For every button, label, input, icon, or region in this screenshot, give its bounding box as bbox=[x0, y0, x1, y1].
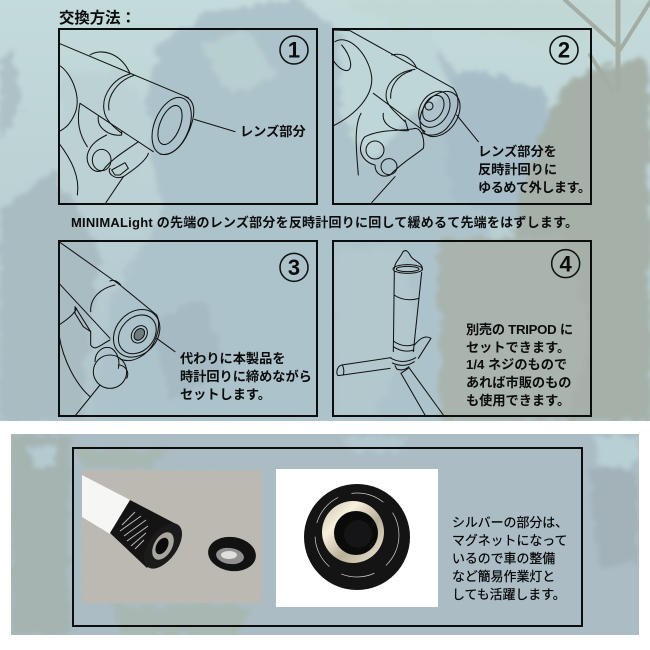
instruction text: ゆるめて外します。 bbox=[478, 179, 591, 195]
frame bbox=[73, 448, 582, 626]
description text: シルバーの部分は、 bbox=[452, 515, 568, 530]
instruction text: 反時計回りに bbox=[478, 161, 557, 177]
line art: light on tripod bbox=[337, 251, 443, 415]
photo: magnet disc on white bbox=[276, 469, 438, 607]
step number 4: 4 bbox=[560, 251, 573, 276]
panel 4: tripod bbox=[333, 241, 591, 416]
instruction text bbox=[180, 350, 312, 402]
instruction text: 1/4 ネジのもので bbox=[466, 357, 567, 372]
caption: MINIMALight の先端のレンズ部分を反時計回りに回して緩めるて先端をはずします。 bbox=[71, 215, 578, 230]
description text: など簡易作業灯と bbox=[452, 569, 555, 584]
description text: いるので車の整備 bbox=[452, 551, 555, 566]
step number 3: 3 bbox=[288, 255, 300, 280]
instruction text: セットできます。 bbox=[466, 340, 570, 355]
step number 3 bbox=[280, 253, 308, 281]
step number 4 bbox=[552, 250, 580, 278]
panel 2: turn lens counterclockwise bbox=[333, 29, 591, 204]
line art: light with product attached bbox=[59, 242, 175, 416]
step number 1: 1 bbox=[288, 38, 300, 63]
instruction text: も使用できます。 bbox=[466, 392, 570, 408]
frame bbox=[333, 29, 591, 204]
instruction text bbox=[466, 321, 573, 408]
frame bbox=[59, 241, 317, 416]
background: lower forest panel bbox=[11, 434, 639, 635]
line art: hand loosening lens bbox=[333, 30, 478, 203]
description text bbox=[452, 515, 568, 602]
instruction text: レンズ部分を bbox=[478, 143, 557, 159]
panel 1: lens part bbox=[59, 29, 317, 204]
description text: しても活躍します。 bbox=[452, 587, 566, 602]
instruction text: あれば市販のもの bbox=[466, 374, 572, 390]
frame bbox=[333, 241, 591, 416]
step number 2: 2 bbox=[558, 38, 570, 63]
background: tree trunk and branches bbox=[563, 0, 650, 72]
instruction text bbox=[478, 143, 591, 195]
line art: hand holding light bbox=[59, 43, 235, 204]
label: レンズ部分 bbox=[240, 123, 306, 139]
frame bbox=[59, 29, 317, 204]
step number 2 bbox=[550, 36, 578, 64]
panel 3: set new part clockwise bbox=[59, 241, 317, 416]
instruction text: 代わりに本製品を bbox=[180, 350, 286, 366]
panel: magnet feature bbox=[73, 448, 582, 626]
heading: 交換方法： bbox=[59, 8, 136, 27]
description text: マグネットになって bbox=[452, 533, 567, 548]
instruction text: セットします。 bbox=[180, 387, 271, 402]
photo: light with lens removed bbox=[82, 470, 262, 603]
step number 1 bbox=[280, 36, 308, 64]
background: upper forest panel bbox=[0, 0, 650, 421]
instruction text: 時計回りに締めながら bbox=[180, 368, 312, 384]
instruction text: 別売の TRIPOD に bbox=[466, 321, 573, 337]
